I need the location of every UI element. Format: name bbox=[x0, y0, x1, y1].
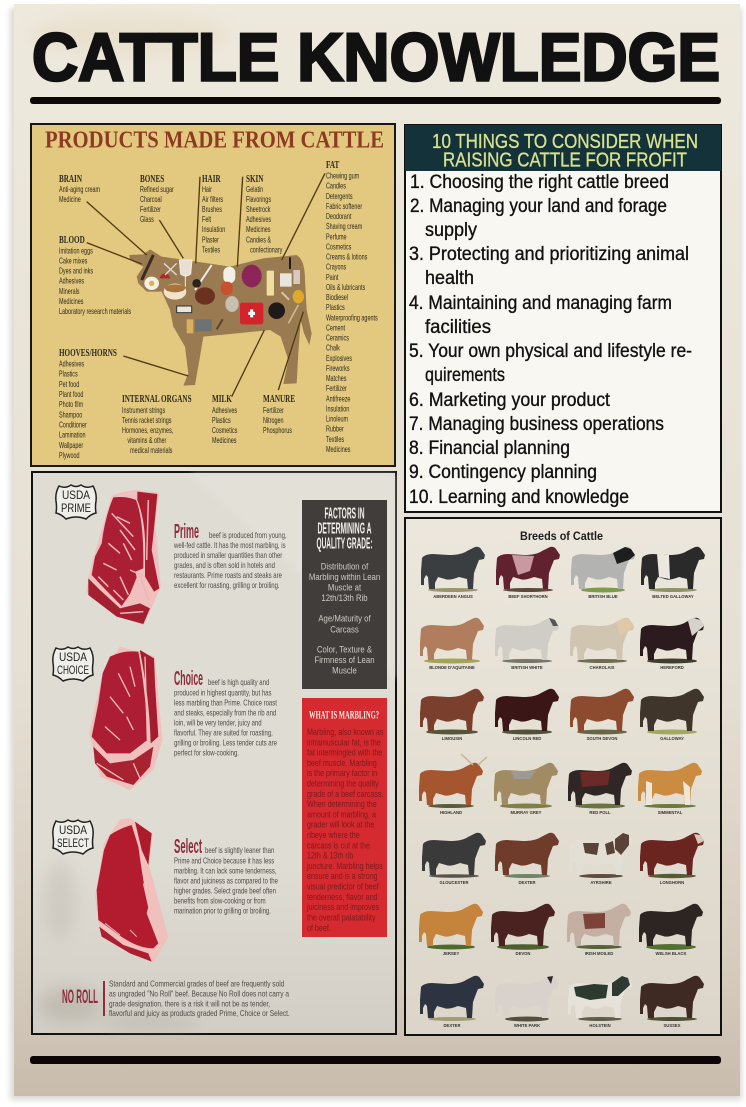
cow: devon bbox=[491, 904, 555, 956]
products: fat: Matches bbox=[326, 375, 347, 383]
products: fat: Fireworks bbox=[326, 365, 350, 373]
text: select: Select bbox=[174, 836, 202, 858]
text: choice: produced in highest quantity, but has bbox=[174, 690, 272, 698]
panel: beef grades bbox=[32, 472, 396, 1034]
box: factors in determining a quality grade: QUALITY GRADE: bbox=[316, 536, 372, 552]
products: manure: Phosphorus bbox=[263, 427, 292, 435]
badge: usda prime: USDA bbox=[62, 488, 90, 502]
text: select bbox=[174, 836, 278, 916]
products: fat: Detergents bbox=[326, 193, 353, 201]
products: skin: Sheetrock bbox=[246, 206, 271, 214]
products: internal organs: Instrument strings bbox=[122, 407, 166, 415]
products: hooves and horns bbox=[59, 347, 117, 460]
products: blood: BLOOD bbox=[59, 234, 85, 245]
box: what is marbling: beef muscle. Marbling bbox=[307, 757, 377, 768]
text: select: beef is slightly leaner than bbox=[205, 847, 274, 855]
box: what is marbling: is the primary factor in bbox=[307, 767, 377, 778]
products: internal organs: INTERNAL ORGANS bbox=[122, 393, 192, 404]
product icons on cow bbox=[142, 255, 304, 333]
cow: devon: DEVON bbox=[516, 951, 530, 956]
products: blood: Dyes and inks bbox=[59, 268, 94, 276]
text: select: flavor and juiciness as compared to the bbox=[174, 878, 278, 886]
panel: 10 things to consider bbox=[405, 125, 721, 512]
products: blood bbox=[59, 234, 132, 316]
box: factors in determining a quality grade: Color, Texture & bbox=[317, 644, 372, 655]
products: fat: Antifreeze bbox=[326, 395, 351, 404]
products: skin: confectionary bbox=[250, 247, 283, 255]
products heading: PRODUCTS MADE FROM CATTLE bbox=[45, 128, 384, 154]
cow: dexter: DEXTER bbox=[518, 880, 536, 885]
products: fat: Ceramics bbox=[326, 335, 349, 343]
products: blood: Cake mixes bbox=[59, 258, 88, 266]
badge: usda choice bbox=[53, 647, 93, 681]
numbered list: 5. Your own physical and lifestyle re- bbox=[409, 341, 692, 362]
text: prime: beef is produced from young, bbox=[209, 532, 287, 540]
products: fat: Cement bbox=[326, 325, 345, 333]
products: fat: Fabric softener bbox=[326, 203, 363, 211]
cow: longhorn bbox=[640, 833, 704, 885]
products: hair: Insulation bbox=[202, 226, 225, 234]
products: blood: Imitation eggs bbox=[59, 248, 93, 256]
products: internal organs: Tennis racket strings bbox=[122, 417, 172, 425]
badge: usda choice: USDA bbox=[59, 650, 87, 664]
cow: south devon bbox=[570, 689, 634, 741]
cow: aberdeen angus: ABERDEEN ANGUS bbox=[433, 594, 473, 599]
box: what is marbling: ensure and is a strong bbox=[307, 870, 378, 881]
numbered list bbox=[409, 172, 692, 508]
products: internal organs: medical materials bbox=[130, 447, 173, 455]
box: what is marbling: determining the quality bbox=[307, 777, 379, 789]
products: fat: Cosmetics bbox=[326, 244, 352, 252]
products: hooves and horns: Plant food bbox=[59, 391, 84, 399]
products: hooves and horns: HOOVES/HORNS bbox=[59, 347, 117, 358]
box: what is marbling: ribeye where the bbox=[307, 829, 360, 840]
numbered list: quirements bbox=[425, 365, 505, 386]
box: what is marbling: juncture. Marbling helps bbox=[306, 860, 383, 871]
cow: gloucester bbox=[422, 833, 486, 885]
products: hooves and horns: Adhesives bbox=[59, 361, 85, 369]
cow: dexter bbox=[495, 833, 559, 885]
cow: sussex bbox=[640, 976, 704, 1028]
cow: dexter black: DEXTER bbox=[444, 1023, 460, 1028]
cow: lincoln red bbox=[495, 689, 559, 741]
cow: hereford: HEREFORD bbox=[660, 665, 684, 670]
products: fat: Creams & lotions bbox=[326, 254, 368, 262]
products: hair: Plaster bbox=[202, 237, 219, 245]
cow: white park: WHITE PARK bbox=[514, 1023, 540, 1028]
products: fat: Deodorant bbox=[326, 213, 351, 221]
cow: red poll bbox=[568, 763, 632, 815]
products: fat: Insulation bbox=[326, 406, 349, 414]
panel: products made from cattle bbox=[31, 124, 395, 466]
numbered list: 7. Managing business operations bbox=[409, 414, 664, 435]
cow: beef shorthorn bbox=[496, 547, 560, 599]
products: fat: Waterproofing agents bbox=[326, 314, 378, 323]
products: bones: Fertilizer bbox=[140, 206, 161, 214]
cow: blonde d'aquitaine bbox=[420, 618, 484, 670]
products: fat: Linoleum bbox=[326, 416, 348, 424]
box: what is marbling: intramuscular fat, is the bbox=[307, 736, 381, 748]
cow: irish moiled: IRISH MOILED bbox=[585, 951, 613, 956]
steak: select bbox=[95, 818, 168, 962]
products: fat: Biodiesel bbox=[326, 294, 348, 302]
box: factors in determining a quality grade: FACTORS IN bbox=[324, 506, 364, 522]
products: skin: Flavorings bbox=[246, 196, 272, 204]
header band: 10 THINGS TO CONSIDER WHEN bbox=[432, 131, 698, 153]
cow: belted galloway: BELTED GALLOWAY bbox=[652, 594, 694, 599]
badge: usda prime bbox=[56, 485, 96, 519]
text: prime: excellent for roasting, grilling or broiling. bbox=[174, 582, 280, 590]
box: what is marbling: visual predictor of beef bbox=[307, 880, 379, 892]
text: choice: loin, will be very tender, juicy and bbox=[174, 720, 262, 728]
products: bones: Glass bbox=[140, 216, 154, 224]
products: fat: Explosives bbox=[326, 355, 352, 363]
box: what is marbling: 12th & 13th rib bbox=[307, 850, 354, 861]
cow: blonde d'aquitaine: BLONDE D'AQUITAINE bbox=[429, 665, 475, 670]
header band: RAISING CATTLE FOR FROFIT bbox=[443, 150, 687, 172]
text: prime bbox=[173, 521, 287, 590]
cow: limousin: LIMOUSIN bbox=[442, 736, 462, 741]
box: factors in determining a quality grade: Muscle bbox=[332, 665, 357, 676]
products: milk: Adhesives bbox=[212, 407, 238, 415]
products: fat: FAT bbox=[326, 159, 339, 170]
steak: choice bbox=[89, 647, 162, 790]
numbered list: 9. Contingency planning bbox=[409, 462, 597, 483]
products: hair bbox=[202, 173, 225, 255]
products: hair: Hair bbox=[202, 186, 213, 194]
cow: aberdeen angus bbox=[421, 547, 485, 599]
badge: usda prime: PRIME bbox=[61, 501, 91, 515]
cow: highland: HIGHLAND bbox=[440, 810, 462, 815]
text: select: Prime and Choice because it has less bbox=[174, 858, 275, 866]
products: fat: Rubber bbox=[326, 426, 344, 434]
products: fat: Chewing gum bbox=[326, 173, 359, 181]
cow: highland bbox=[419, 754, 487, 815]
products: hooves and horns: Lamination bbox=[59, 432, 86, 440]
cow: murray grey: MURRAY GREY bbox=[511, 810, 542, 815]
cow: jersey: JERSEY bbox=[443, 951, 459, 956]
box: what is marbling: grader will look at the bbox=[307, 819, 375, 830]
cow: ayrshire: AYRSHIRE bbox=[590, 880, 612, 885]
text: no roll: NO ROLL bbox=[62, 987, 98, 1008]
text: no roll: as ungraded "No Roll" beef. Because No Roll does not carry a bbox=[109, 989, 290, 999]
products: hair: Felt bbox=[202, 216, 211, 224]
products: hair: Textiles bbox=[202, 247, 221, 255]
cow: belted galloway bbox=[641, 547, 705, 599]
cow: hereford bbox=[640, 618, 704, 670]
cow: gloucester: GLOUCESTER bbox=[439, 880, 469, 885]
cow: jersey bbox=[419, 904, 483, 956]
numbered list: 8. Financial planning bbox=[409, 438, 570, 459]
products: bones: Refined sugar bbox=[140, 186, 174, 194]
products: fat: Chalk bbox=[326, 345, 340, 353]
cow: british white: BRITISH WHITE bbox=[511, 665, 543, 670]
title: CATTLE KNOWLEDGE bbox=[32, 20, 720, 96]
products: hair: Air filters bbox=[202, 196, 224, 204]
numbered list: 4. Maintaining and managing farm bbox=[409, 293, 672, 314]
box: what is marbling: juiciness and improves bbox=[306, 901, 379, 912]
cow: charolais bbox=[570, 618, 634, 670]
box: what is marbling: grade of a beef carcass. bbox=[307, 788, 383, 799]
products: manure: MANURE bbox=[263, 393, 295, 404]
cow: welsh black bbox=[639, 904, 703, 956]
cow: holstein: HOLSTEIN bbox=[589, 1023, 611, 1028]
cow: british blue: BRITISH BLUE bbox=[588, 594, 618, 599]
cow: irish moiled bbox=[567, 904, 631, 956]
breeds heading: Breeds of Cattle bbox=[520, 529, 603, 543]
text: choice: perfect for slow-cooking. bbox=[174, 750, 239, 758]
products: skin: SKIN bbox=[246, 173, 264, 184]
text: choice: less marbling than Prime. Choice roast bbox=[174, 700, 277, 708]
cow: ayrshire bbox=[569, 833, 633, 885]
products: bones bbox=[140, 173, 174, 224]
products: fat: Paint bbox=[326, 274, 338, 282]
cow diagram with leader lines bbox=[87, 173, 325, 397]
badge: usda select: SELECT bbox=[57, 836, 89, 850]
numbered list: facilities bbox=[425, 317, 491, 338]
text: prime: well-fed cattle. It has the most marbling, is bbox=[173, 542, 286, 550]
cow: galloway: GALLOWAY bbox=[660, 736, 684, 741]
box: what is marbling: of beef. bbox=[307, 922, 331, 933]
products: internal organs: Hormones, enzymes, bbox=[122, 427, 173, 435]
products: fat: Textiles bbox=[326, 436, 345, 444]
box: what is marbling: carcass is cut at the bbox=[307, 839, 370, 851]
products: milk: Medicines bbox=[212, 437, 237, 445]
products: brain: Anti-aging cream bbox=[59, 186, 100, 194]
text: choice: and steaks, especially from the rib and bbox=[174, 710, 276, 718]
box: factors in determining a quality grade: Age/Maturity of bbox=[318, 613, 371, 624]
products: internal organs bbox=[122, 393, 192, 455]
text: select: marbling. It can lack some tenderness, bbox=[174, 868, 277, 876]
text: choice: beef is high quality and bbox=[208, 679, 269, 687]
box: factors in determining a quality grade: DETERMINING A bbox=[318, 520, 372, 538]
products: skin bbox=[246, 173, 283, 255]
products: fat bbox=[326, 159, 378, 454]
cow: simmental: SIMMENTAL bbox=[658, 810, 683, 815]
badge: usda choice: CHOICE bbox=[57, 663, 89, 677]
box: what is marbling: amount of marbling, a bbox=[307, 808, 376, 820]
products: brain: BRAIN bbox=[59, 173, 82, 184]
products: hooves and horns: Plywood bbox=[59, 452, 80, 460]
badge: usda select: USDA bbox=[59, 823, 87, 837]
numbered list: 6. Marketing your product bbox=[409, 390, 611, 411]
products: hair: HAIR bbox=[202, 173, 221, 184]
products: brain: Medicine bbox=[59, 196, 81, 204]
products: hooves and horns: Photo film bbox=[59, 401, 83, 410]
text: prime: produced in smaller quantities than other bbox=[174, 552, 283, 560]
cow: dexter black bbox=[420, 976, 484, 1028]
box: what is marbling: WHAT IS MARBLING? bbox=[309, 708, 379, 722]
box: what is marbling: tenderness, flavor and bbox=[307, 891, 378, 902]
cow: murray grey bbox=[494, 763, 558, 815]
products: hooves and horns: Wallpaper bbox=[59, 442, 84, 450]
text: choice bbox=[174, 668, 277, 758]
steak: prime bbox=[86, 490, 161, 625]
text: choice: Choice bbox=[174, 668, 203, 690]
products: milk bbox=[212, 393, 238, 445]
badge: usda select bbox=[53, 820, 93, 854]
box: what is marbling: fat intermingled with the bbox=[307, 747, 383, 758]
cow: british white bbox=[495, 618, 559, 670]
numbered list: 1. Choosing the right cattle breed bbox=[410, 172, 669, 193]
products: fat: Perfume bbox=[326, 233, 347, 242]
header band bbox=[405, 125, 721, 172]
products: internal organs: vitamins & other bbox=[127, 437, 167, 445]
text: select: marination prior to grilling or broiling. bbox=[174, 908, 271, 916]
cow: limousin bbox=[420, 689, 484, 741]
text: select: benefits from slow-cooking or from bbox=[174, 898, 266, 906]
products: milk: MILK bbox=[212, 393, 232, 404]
cow: beef shorthorn: BEEF SHORTHORN bbox=[508, 594, 548, 599]
products: bones: BONES bbox=[140, 173, 164, 184]
numbered list: health bbox=[425, 268, 474, 289]
numbered list: supply bbox=[425, 220, 477, 241]
text: prime: grades, and is often sold in hotels and bbox=[174, 562, 275, 570]
products: blood: Minerals bbox=[59, 288, 80, 296]
products: brain bbox=[59, 173, 100, 204]
box: what is marbling bbox=[302, 698, 387, 937]
text: no roll bbox=[62, 979, 290, 1018]
products: fat: Crayons bbox=[326, 264, 347, 272]
products: blood: Laboratory research materials bbox=[59, 308, 132, 316]
box: factors in determining a quality grade: Distribution of bbox=[321, 561, 369, 572]
text: choice: grilling or broiling. Less tender cuts are bbox=[174, 740, 277, 748]
products: skin: Adhesives bbox=[246, 216, 272, 224]
cow: holstein bbox=[568, 976, 632, 1028]
cow: galloway bbox=[640, 689, 704, 741]
cow: lincoln red: LINCOLN RED bbox=[513, 736, 541, 741]
products: fat: Fertilizer bbox=[326, 385, 347, 394]
products: hooves and horns: Shampoo bbox=[59, 411, 82, 420]
products: manure bbox=[263, 393, 295, 435]
box: factors in determining a quality grade bbox=[302, 500, 387, 689]
bottom rule bbox=[30, 1056, 721, 1064]
cow: south devon: SOUTH DEVON bbox=[587, 736, 617, 741]
cow: simmental bbox=[638, 763, 702, 815]
box: what is marbling: Marbling, also known as bbox=[307, 726, 383, 737]
products: hooves and horns: Plastics bbox=[59, 371, 78, 379]
numbered list: 10. Learning and knowledge bbox=[409, 487, 629, 508]
products: milk: Cosmetics bbox=[212, 427, 238, 435]
products: hair: Brushes bbox=[202, 206, 222, 214]
cow: sussex: SUSSEX bbox=[664, 1023, 681, 1028]
box: what is marbling: the overall palatability bbox=[307, 911, 376, 923]
cow: longhorn: LONGHORN bbox=[660, 880, 684, 885]
text: no roll: Standard and Commercial grades of beef are frequently sold bbox=[109, 979, 284, 989]
box: factors in determining a quality grade: Muscle at bbox=[328, 582, 362, 593]
box: factors in determining a quality grade: 12th/13th Rib bbox=[321, 592, 368, 603]
box: factors in determining a quality grade: Marbling within Lean bbox=[309, 571, 380, 582]
cow: charolais: CHAROLAIS bbox=[590, 665, 615, 670]
panel: breeds of cattle bbox=[405, 518, 721, 1035]
text: no roll: grade designation, there is a risk it will not be as tender, bbox=[109, 999, 270, 1009]
text: prime: Prime bbox=[174, 521, 199, 543]
box: factors in determining a quality grade: Firmness of Lean bbox=[314, 654, 375, 665]
products: hooves and horns: Pet food bbox=[59, 381, 79, 389]
top rule bbox=[30, 97, 721, 104]
products: blood: Adhesives bbox=[59, 278, 85, 286]
cow: british blue bbox=[571, 547, 635, 599]
text: no roll: flavorful and juicy as products graded Prime, Choice or Select. bbox=[109, 1008, 290, 1018]
products: skin: Medicines bbox=[246, 226, 271, 234]
text: choice: flavorful. They are suited for roasting, bbox=[174, 730, 273, 738]
products: blood: Medicines bbox=[59, 298, 84, 306]
products: manure: Fertilizer bbox=[263, 407, 284, 415]
box: what is marbling: When determining the bbox=[307, 798, 377, 809]
products: skin: Candies & bbox=[246, 237, 271, 245]
products: fat: Oils & lubricants bbox=[326, 284, 366, 292]
text: prime: restaurants. Prime roasts and steaks are bbox=[174, 572, 282, 580]
products: fat: Medicines bbox=[326, 446, 351, 454]
cow: welsh black: WELSH BLACK bbox=[656, 951, 686, 956]
cow: white park bbox=[495, 976, 559, 1028]
products: skin: Gelatin bbox=[246, 186, 263, 194]
products: bones: Charcoal bbox=[140, 196, 162, 204]
products: milk: Plastics bbox=[212, 417, 231, 425]
products: fat: Plastics bbox=[326, 304, 345, 313]
numbered list: 3. Protecting and prioritizing animal bbox=[409, 244, 689, 265]
products: manure: Nitrogen bbox=[263, 417, 284, 425]
products: fat: Candles bbox=[326, 183, 346, 191]
text: select: higher grades. Select grade beef often bbox=[174, 888, 276, 896]
products: fat: Shaving cream bbox=[326, 223, 362, 232]
numbered list: 2. Managing your land and forage bbox=[410, 196, 667, 217]
cow: red poll: RED POLL bbox=[589, 810, 611, 815]
products: hooves and horns: Conditioner bbox=[59, 422, 87, 430]
box: factors in determining a quality grade: Carcass bbox=[330, 624, 359, 635]
